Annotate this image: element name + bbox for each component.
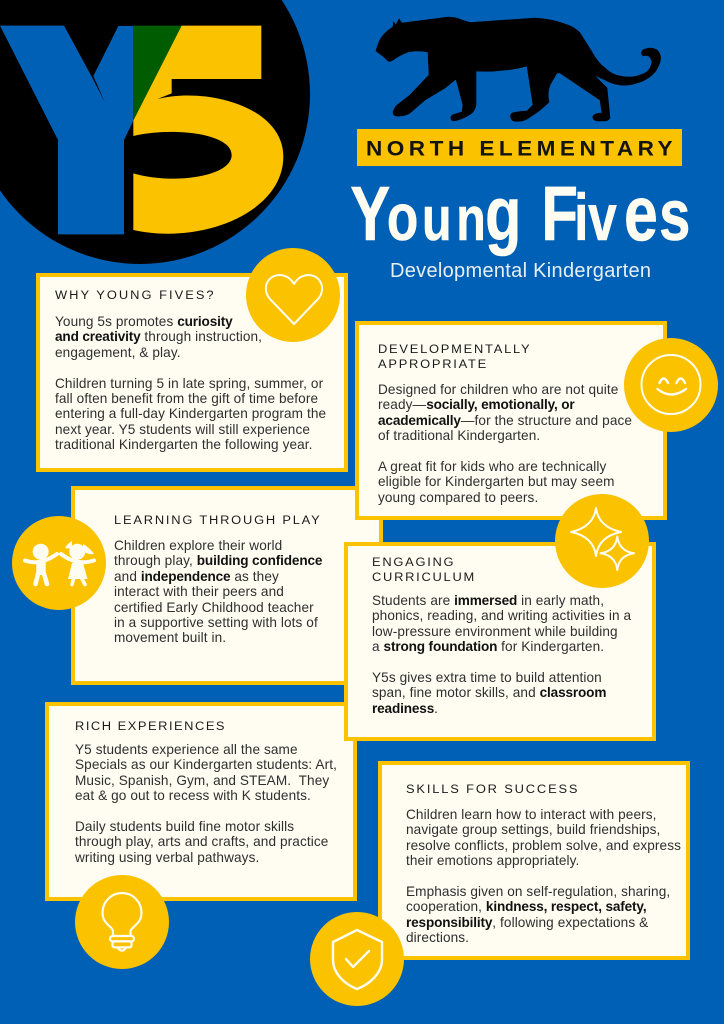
panel: rich experiences — [45, 702, 357, 901]
text: why young fives — [55, 314, 326, 452]
text: developmentally appropriate: Designed for children who are not quite — [378, 382, 618, 397]
text: developmentally appropriate: eligible for Kindergarten but may seem — [378, 474, 615, 489]
text: engaging curriculum — [372, 593, 632, 716]
text: why young fives: next year. Y5 students will still experience — [55, 422, 310, 437]
title: i — [574, 180, 588, 254]
panel: engaging curriculum — [344, 542, 656, 741]
panel: learning through play — [71, 486, 383, 685]
heading: why young fives: WHY YOUNG FIVES? — [55, 290, 216, 302]
text: developmentally appropriate: academically—for the structure and pace — [378, 413, 632, 428]
icon: sparkles — [555, 494, 649, 588]
text: rich experiences: Specials as our Kindergarten students: Art, — [75, 757, 337, 772]
heading: developmentally appropriate — [378, 344, 531, 371]
text: rich experiences — [75, 742, 337, 865]
heading: rich experiences: RICH EXPERIENCES — [75, 721, 226, 733]
text: skills for success — [406, 807, 681, 945]
text: learning through play: interact with their peers and — [114, 584, 284, 599]
text: why young fives: engagement, & play. — [55, 345, 181, 360]
text: engaging curriculum: low-pressure environment while building — [372, 624, 618, 639]
text: skills for success: Children learn how to interact with peers, — [406, 807, 657, 822]
text: skills for success: navigate group settings, build friendships, — [406, 822, 660, 837]
icon: smiley face — [624, 338, 718, 432]
heading: developmentally appropriate: DEVELOPMENTALLY — [378, 344, 531, 356]
text: engaging curriculum: phonics, reading, and writing activities in a — [372, 608, 631, 623]
heading: engaging curriculum: CURRICULUM — [372, 572, 476, 584]
title — [350, 170, 690, 257]
text: engaging curriculum: span, fine motor skills, and classroom — [372, 685, 606, 700]
text: rich experiences: eat & go out to recess with K students. — [75, 788, 311, 803]
text: rich experiences: Music, Spanish, Gym, and STEAM. They — [75, 773, 329, 788]
text: skills for success: responsibility, following expectations & — [406, 915, 648, 930]
panel: developmentally appropriate — [355, 321, 667, 520]
heading: learning through play: LEARNING THROUGH PLAY — [114, 515, 321, 527]
logo: Y5 on black circle — [0, 0, 310, 264]
icon: two children — [12, 516, 106, 610]
title: o — [387, 180, 418, 254]
heading: skills for success: SKILLS FOR SUCCESS — [406, 784, 579, 796]
text: rich experiences: Daily students build fine motor skills — [75, 819, 294, 834]
text: learning through play: in a supportive setting with lots of — [114, 615, 318, 630]
text: engaging curriculum: readiness. — [372, 701, 438, 716]
text: why young fives: Children turning 5 in late spring, summer, or — [55, 376, 323, 391]
text: why young fives: entering a full-day Kindergarten program the — [55, 406, 326, 421]
text: rich experiences: through play, arts and crafts, and practice — [75, 834, 328, 849]
title: u — [422, 184, 452, 253]
text: learning through play — [114, 538, 322, 645]
text: why young fives: fall often benefit from the gift of time before — [55, 391, 318, 406]
text: why young fives: traditional Kindergarten the following year. — [55, 437, 313, 452]
title: F — [541, 170, 578, 257]
subtitle: Developmental Kindergarten — [390, 260, 651, 282]
text: developmentally appropriate: A great fit for kids who are technically — [378, 459, 606, 474]
title: s — [659, 175, 690, 256]
text: rich experiences: Y5 students experience all the same — [75, 742, 298, 757]
text: developmentally appropriate: of traditional Kindergarten. — [378, 428, 540, 443]
text: learning through play: certified Early Childhood teacher — [114, 600, 314, 615]
icon: heart — [246, 248, 340, 342]
school name banner — [357, 129, 682, 166]
title: g — [485, 172, 521, 257]
text: developmentally appropriate: young compared to peers. — [378, 490, 538, 505]
title: Y — [350, 170, 390, 257]
text: developmentally appropriate: ready—socially, emotionally, or — [378, 397, 575, 412]
text: skills for success: Emphasis given on self-regulation, sharing, — [406, 884, 670, 899]
text: skills for success: resolve conflicts, problem solve, and express — [406, 838, 681, 853]
title: e — [624, 170, 658, 257]
text: skills for success: cooperation, kindness, respect, safety, — [406, 899, 646, 914]
school name banner: NORTH ELEMENTARY — [366, 136, 673, 160]
text: skills for success: directions. — [406, 930, 469, 945]
heading: developmentally appropriate: APPROPRIATE — [378, 359, 488, 371]
text: learning through play: through play, building confidence — [114, 553, 322, 568]
text: engaging curriculum: a strong foundation for Kindergarten. — [372, 639, 604, 654]
text: skills for success: their emotions appropriately. — [406, 853, 579, 868]
panel: why young fives — [36, 273, 348, 472]
text: engaging curriculum: Y5s gives extra time to build attention — [372, 670, 602, 685]
text: why young fives: and creativity through instruction, — [55, 329, 262, 344]
text: learning through play: Children explore their world — [114, 538, 282, 553]
title: v — [588, 180, 617, 254]
text: learning through play: movement built in. — [114, 630, 226, 645]
icon: black panther silhouette — [376, 16, 661, 122]
text: developmentally appropriate — [378, 382, 632, 505]
text: rich experiences: writing using verbal pathways. — [75, 850, 259, 865]
title: n — [456, 184, 486, 253]
text: learning through play: and independence as they — [114, 569, 279, 584]
heading: engaging curriculum: ENGAGING — [372, 557, 455, 569]
text: why young fives: Young 5s promotes curiosity — [55, 314, 233, 329]
heading: engaging curriculum — [372, 557, 476, 584]
text: engaging curriculum: Students are immersed in early math, — [372, 593, 604, 608]
panel: skills for success — [378, 761, 690, 960]
